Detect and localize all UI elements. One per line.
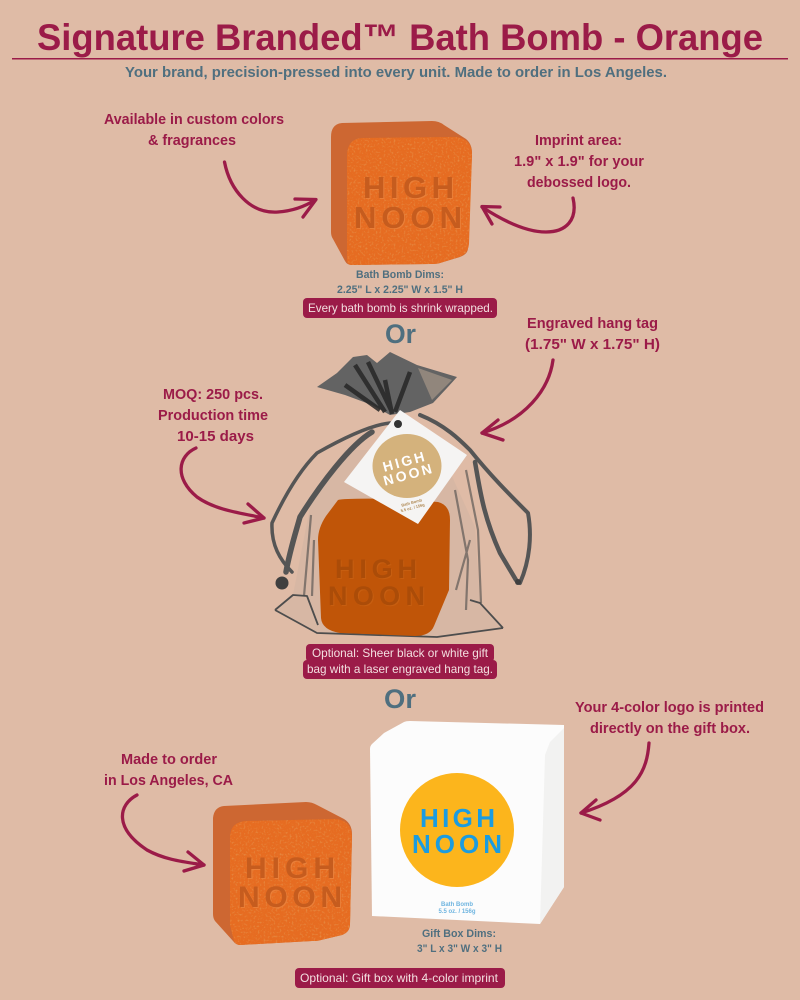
callout: custom colors: & fragrances (148, 133, 236, 149)
gift box product: HIGH (420, 803, 495, 833)
orange bomb (318, 499, 450, 636)
note: sheer bag: Optional: Sheer black or white gift (312, 646, 489, 660)
callout: made to order: Made to order (121, 752, 217, 768)
gift box product: 5.5 oz. / 156g (438, 909, 476, 915)
gift box dimensions: 3" L x 3" W x 3" H (417, 943, 502, 955)
callout: imprint area: 1.9" x 1.9" for your (514, 154, 644, 170)
gift box dimensions: Gift Box Dims: (422, 928, 496, 940)
note: sheer bag: bag with a laser engraved hang tag. (307, 662, 493, 676)
bomb dimensions: Bath Bomb Dims: (356, 269, 444, 281)
callout: imprint area: debossed logo. (527, 175, 631, 191)
arrow: gift box (581, 743, 649, 820)
callout: hang tag (525, 316, 660, 353)
gift box product: NOON (412, 829, 502, 859)
note: shrink wrapped: Every bath bomb is shrink wrapped. (308, 301, 493, 315)
callout: imprint area: Imprint area: (535, 133, 622, 149)
arrow: colors to bomb (224, 162, 316, 217)
sheer bag (275, 450, 503, 637)
divider word: or: Or (385, 319, 416, 349)
callout: custom colors: Available in custom colors (104, 112, 284, 128)
hang tag (344, 410, 467, 524)
arrow: hang tag (482, 360, 553, 440)
title: Signature Branded™ Bath Bomb - Orange (37, 17, 763, 58)
subtitle: Your brand, precision-pressed into every unit. Made to order in Los Angeles. (125, 64, 667, 81)
second bath bomb (213, 802, 352, 945)
callout: 4-color logo (575, 700, 764, 737)
callout: 4-color logo: Your 4-color logo is printed (575, 700, 764, 716)
gift box product: Bath Bomb (441, 902, 473, 908)
note: gift box imprint (295, 968, 505, 988)
bath bomb product: NOON (354, 200, 462, 235)
bath bomb product: HIGH (363, 170, 454, 205)
callout: made to order (104, 752, 234, 789)
gift bag product (272, 352, 530, 637)
callout: 4-color logo: directly on the gift box. (590, 721, 750, 737)
callout: moq: 10-15 days (177, 429, 254, 445)
arrow: imprint to bomb (482, 198, 574, 232)
arrow: moq (181, 448, 264, 523)
bath bomb product (331, 121, 472, 265)
second bath bomb: NOON (238, 881, 342, 914)
bomb dimensions: 2.25" L x 2.25" W x 1.5" H (337, 284, 463, 296)
gift box dimensions (417, 928, 502, 955)
gift bag product: HIGH (381, 448, 429, 475)
callout: moq: MOQ: 250 pcs. (163, 387, 263, 403)
gift bag product: NOON (382, 460, 436, 489)
gift bag product: Bath Bomb (401, 497, 423, 508)
gift bag product: HIGH (335, 554, 417, 584)
second bath bomb: HIGH (245, 852, 335, 885)
gathered top (317, 352, 457, 415)
note: sheer bag (303, 644, 497, 679)
ribbons (272, 423, 390, 572)
note: gift box imprint: Optional: Gift box with 4-color imprint (300, 971, 499, 985)
callout: moq (158, 387, 268, 445)
gift bag product: NOON (328, 581, 425, 611)
note: shrink wrapped (303, 298, 497, 318)
bomb dimensions (337, 269, 463, 296)
arrow: made to order (122, 795, 204, 871)
gift box product (370, 721, 564, 924)
gift bag product: 5.5 oz. / 156g (400, 502, 426, 513)
callout: moq: Production time (158, 408, 268, 424)
callout: custom colors (104, 112, 284, 149)
divider word: or: Or (384, 684, 416, 714)
callout: made to order: in Los Angeles, CA (104, 773, 234, 789)
callout: hang tag: (1.75" W x 1.75" H) (525, 337, 660, 353)
callout: imprint area (514, 133, 644, 191)
callout: hang tag: Engraved hang tag (527, 316, 658, 332)
